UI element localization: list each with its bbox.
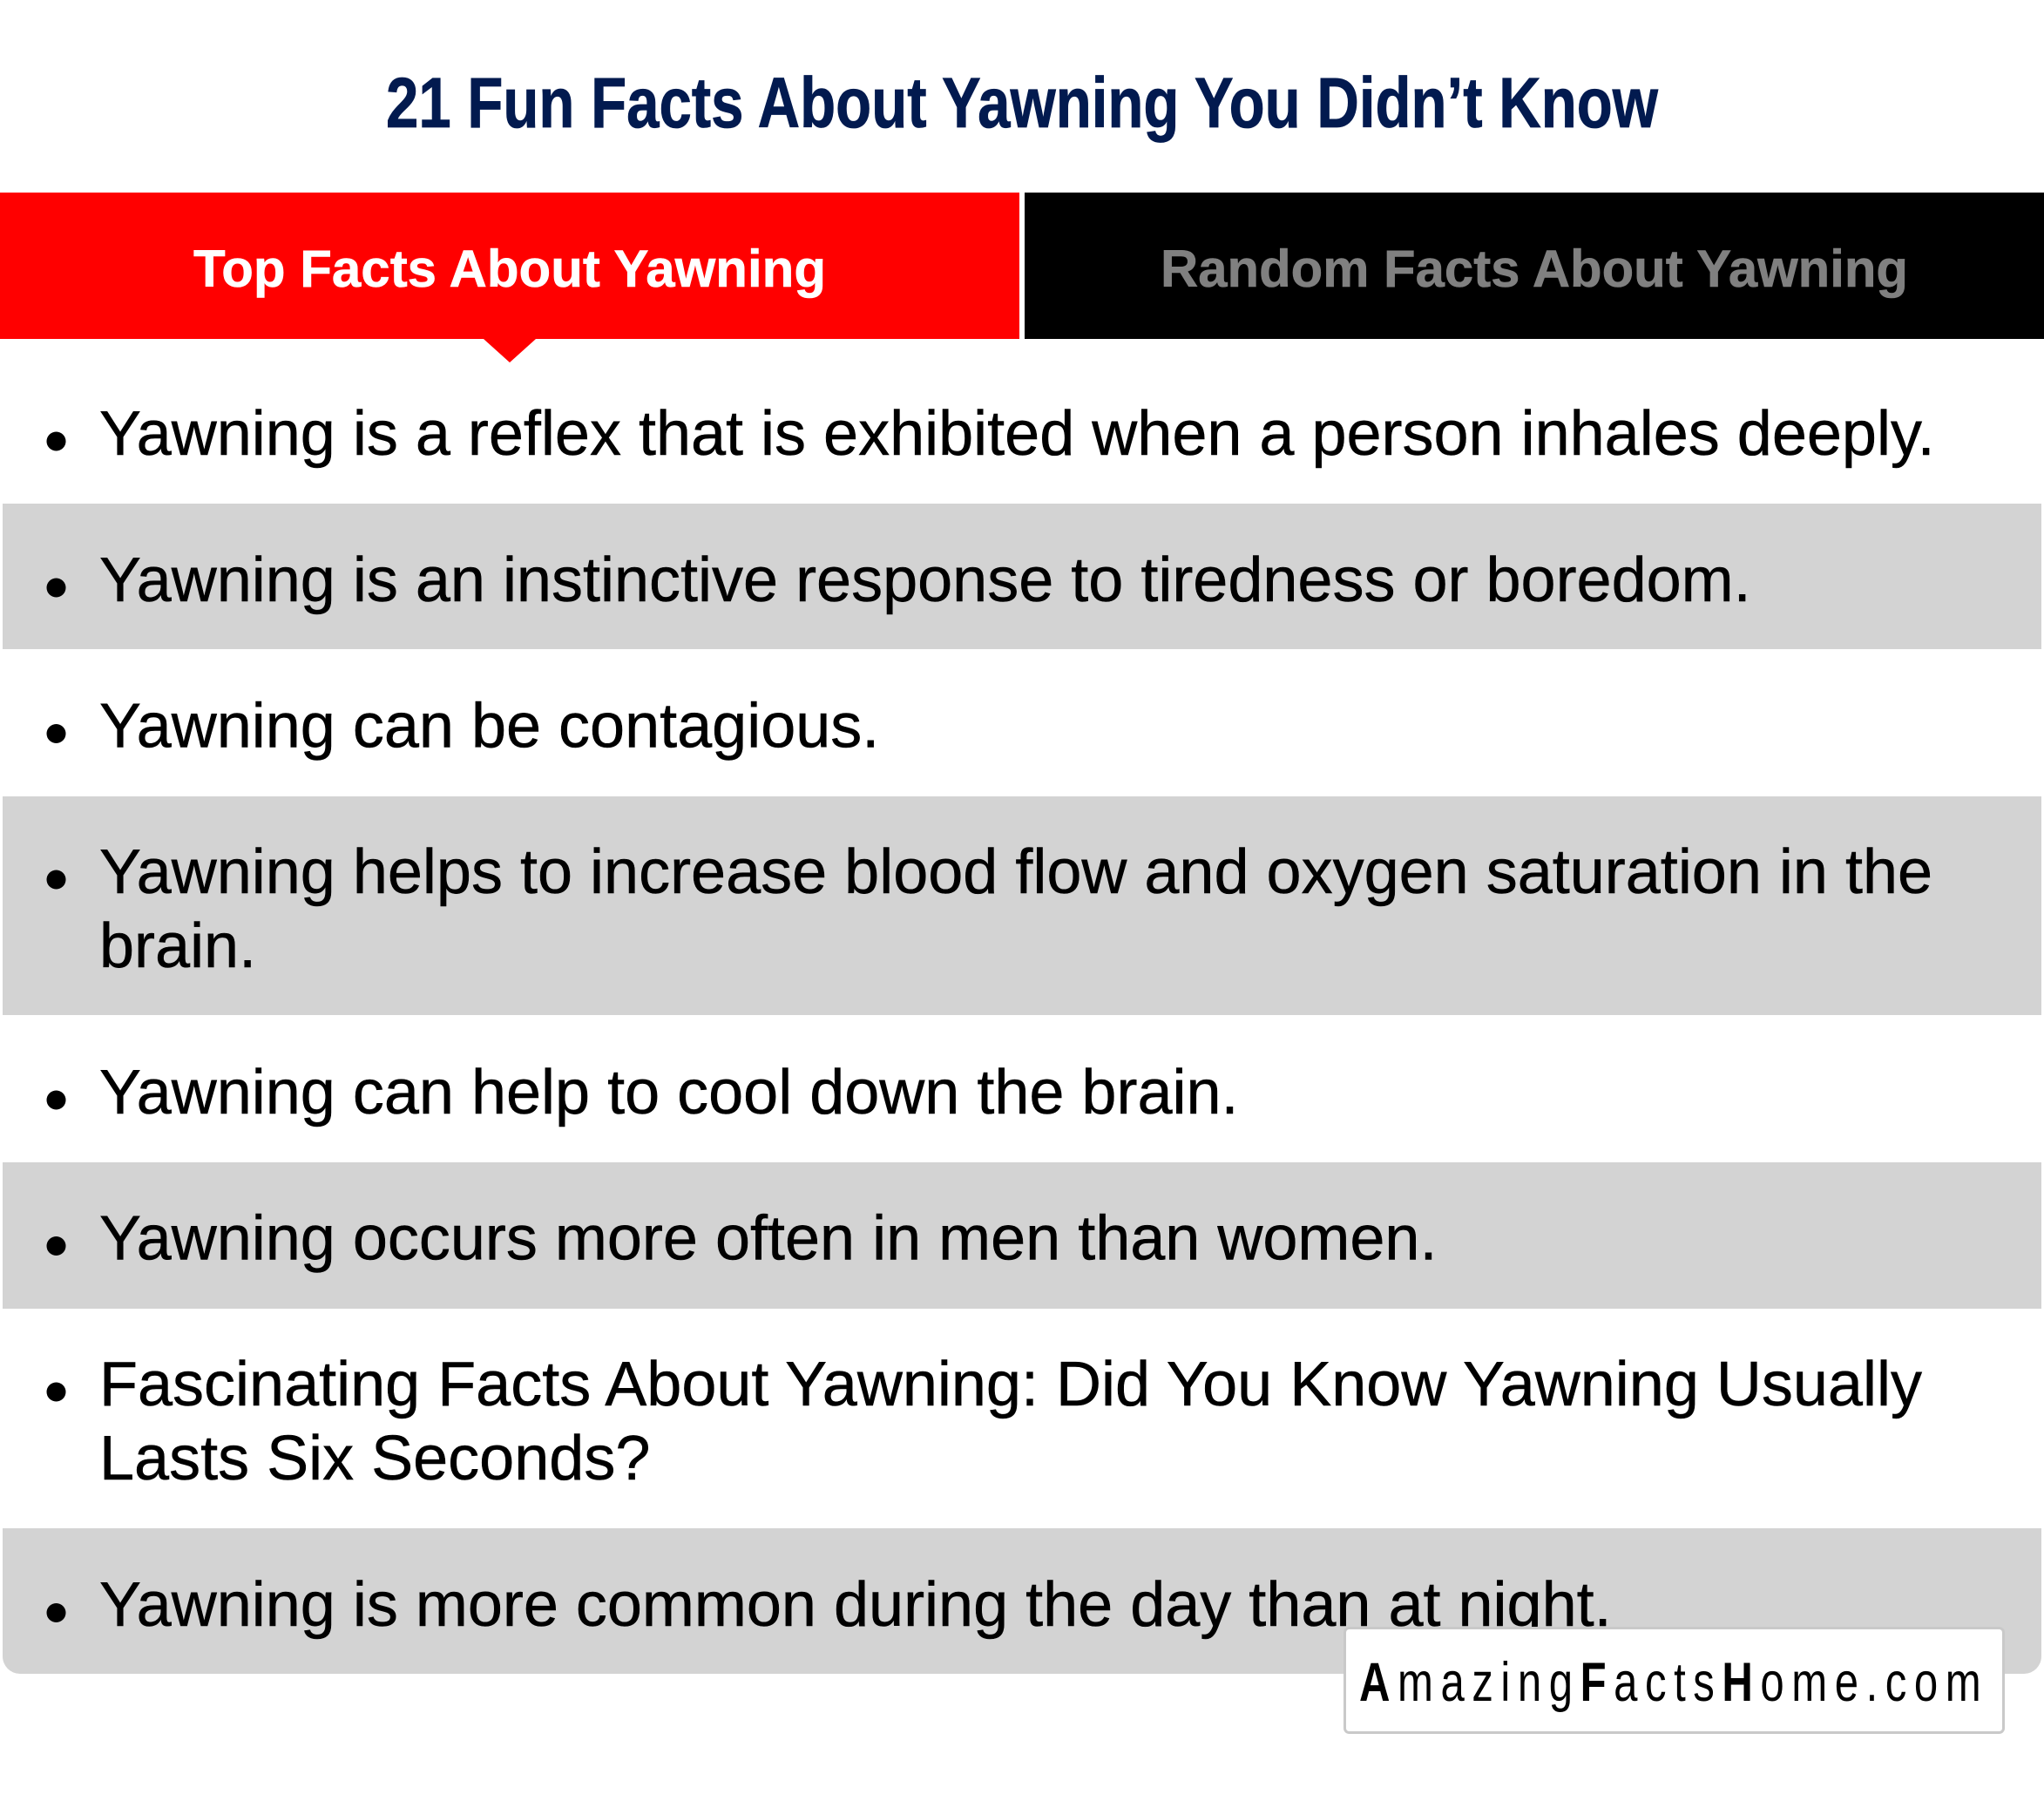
tab: top facts (active): Top Facts About Yawning: [193, 240, 826, 298]
row 4: Yawning helps to increase blood flow and oxygen saturation in the: [99, 837, 1932, 907]
row 7: Lasts Six Seconds?: [99, 1424, 650, 1493]
row 8: Yawning is more common during the day than at night.: [99, 1570, 1612, 1640]
tab: top facts (active): [0, 193, 1019, 362]
row 3: Yawning can be contagious.: [99, 692, 879, 762]
panel: facts list: [3, 399, 2041, 1674]
row 4: [3, 796, 2041, 1015]
title: 21 Fun Facts About Yawning You Didn’t Know: [386, 64, 1658, 143]
row 4: brain.: [99, 911, 256, 981]
row 6: Yawning occurs more often in men than women.: [99, 1204, 1437, 1274]
tab: random facts (inactive): [1025, 193, 2044, 339]
tab: random facts (inactive): Random Facts About Yawning: [1161, 240, 1908, 298]
row 7: Fascinating Facts About Yawning: Did You Know Yawning Usually: [99, 1350, 1922, 1419]
watermark: AmazingFactsHome.com: [1345, 1628, 2004, 1732]
row 1: Yawning is a reflex that is exhibited when a person inhales deeply.: [99, 399, 1935, 469]
row 5: Yawning can help to cool down the brain.: [99, 1058, 1239, 1127]
row 2: [3, 504, 2041, 649]
row 7: [47, 1350, 1922, 1493]
watermark: AmazingFactsHome.com: AmazingFactsHome.com: [1359, 1651, 1981, 1712]
row 6: [3, 1162, 2041, 1309]
row 8: [3, 1528, 2041, 1674]
row 2: Yawning is an instinctive response to tiredness or boredom.: [99, 545, 1751, 615]
